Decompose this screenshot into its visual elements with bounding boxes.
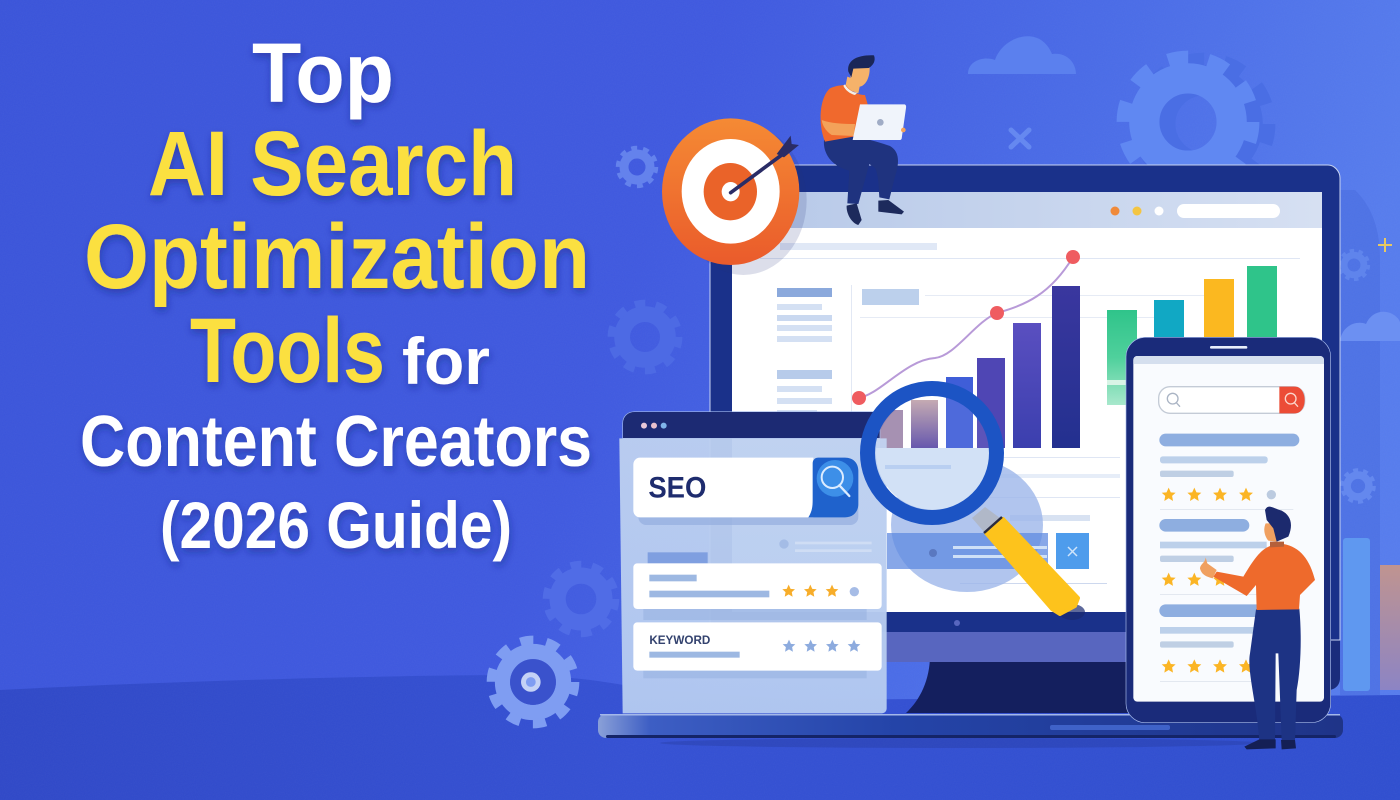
faded tab xyxy=(648,552,708,563)
lens ring xyxy=(868,388,996,518)
neck xyxy=(845,77,861,93)
collar xyxy=(843,84,857,95)
cloud: top xyxy=(968,36,1076,74)
hair xyxy=(1265,507,1291,542)
phone search bar xyxy=(1159,387,1305,413)
face xyxy=(850,66,870,87)
phone speaker xyxy=(1210,346,1247,349)
lens lower tint xyxy=(876,448,990,510)
person pointing at phone xyxy=(1200,507,1315,749)
background bar: mauve xyxy=(1380,565,1400,690)
phone status bar xyxy=(1133,356,1324,364)
phone result 2 xyxy=(1159,519,1267,595)
trousers xyxy=(1249,609,1301,741)
monitor chin xyxy=(710,632,1126,662)
gear: large upper-right shadow xyxy=(1140,60,1268,188)
monitor xyxy=(710,165,1340,713)
trousers xyxy=(824,136,898,204)
gear: right small upper xyxy=(1340,251,1368,279)
target with arrow xyxy=(662,118,807,275)
monitor frame xyxy=(710,165,1340,640)
hand xyxy=(1200,557,1217,578)
collar xyxy=(1270,542,1284,547)
cloud: right xyxy=(1340,312,1400,341)
desk base xyxy=(598,714,1343,748)
arrow xyxy=(731,136,799,193)
monitor screen xyxy=(732,192,1322,612)
SEO label: SEO xyxy=(648,472,706,505)
face xyxy=(1264,523,1277,542)
monitor stand xyxy=(906,655,1128,713)
monitor camera dot xyxy=(954,620,960,626)
handle xyxy=(986,519,1078,614)
panel: SEO browser window xyxy=(619,412,887,713)
screen header lines xyxy=(760,243,1300,498)
gear: faint middle-left xyxy=(612,304,678,370)
forearm xyxy=(822,120,855,136)
magnifying glass xyxy=(868,388,1085,620)
phone screen xyxy=(1133,356,1324,702)
window title bar xyxy=(623,412,880,438)
title line: for: for xyxy=(402,324,490,398)
cross mark xyxy=(1011,130,1029,147)
screen top bar xyxy=(732,192,1322,228)
result card 2 xyxy=(633,622,882,678)
sidebar list xyxy=(777,288,832,416)
shirt xyxy=(1213,544,1315,610)
lens shadow blob xyxy=(887,458,1048,592)
title line: AI Search: AI Search xyxy=(148,113,517,215)
background bar: blue xyxy=(1343,538,1370,691)
title xyxy=(80,26,592,562)
target rings xyxy=(662,118,799,265)
gear: faint lower-left xyxy=(547,565,615,633)
title line: Content Creators: Content Creators xyxy=(80,402,592,482)
laptop xyxy=(853,104,906,140)
gear: small upper-left xyxy=(618,148,656,186)
gear: large lower-left xyxy=(492,641,574,723)
lens line xyxy=(885,465,951,469)
shirt xyxy=(821,85,868,142)
background gears and clouds xyxy=(492,36,1400,723)
window body xyxy=(619,438,887,713)
target shadow xyxy=(680,125,807,275)
faded row xyxy=(779,539,872,552)
sparkle xyxy=(1378,238,1392,252)
gear: right small lower xyxy=(1342,470,1374,502)
phone body xyxy=(1126,337,1331,723)
search bar xyxy=(633,458,858,525)
window dots xyxy=(641,423,667,429)
gear: large upper-right xyxy=(1124,58,1252,186)
handle collar xyxy=(972,507,1000,533)
title line: 2026 Guide: (2026 Guide) xyxy=(160,488,512,562)
phone result 3 xyxy=(1159,604,1266,682)
shoes xyxy=(847,200,904,225)
KEYWORD label: KEYWORD xyxy=(649,633,711,647)
trend line xyxy=(852,250,1080,405)
chart label block xyxy=(862,289,919,305)
handle shadow xyxy=(1059,604,1085,620)
shoes xyxy=(1244,739,1296,749)
lower chart card xyxy=(960,515,1107,584)
title line: Tools: Tools xyxy=(190,300,385,402)
bar chart: purple bars xyxy=(880,286,1080,448)
phone result 1 xyxy=(1159,434,1299,510)
result card 1 xyxy=(633,563,882,620)
person with laptop xyxy=(821,55,906,225)
lens glass xyxy=(876,396,990,510)
hair xyxy=(848,55,875,77)
handle joint xyxy=(984,517,1002,533)
title line: Top: Top xyxy=(252,26,394,120)
title line: Optimization: Optimization xyxy=(84,206,590,308)
monitor right extension xyxy=(1300,300,1340,690)
phone xyxy=(1126,337,1331,723)
bar chart: colour bars xyxy=(1107,266,1277,405)
